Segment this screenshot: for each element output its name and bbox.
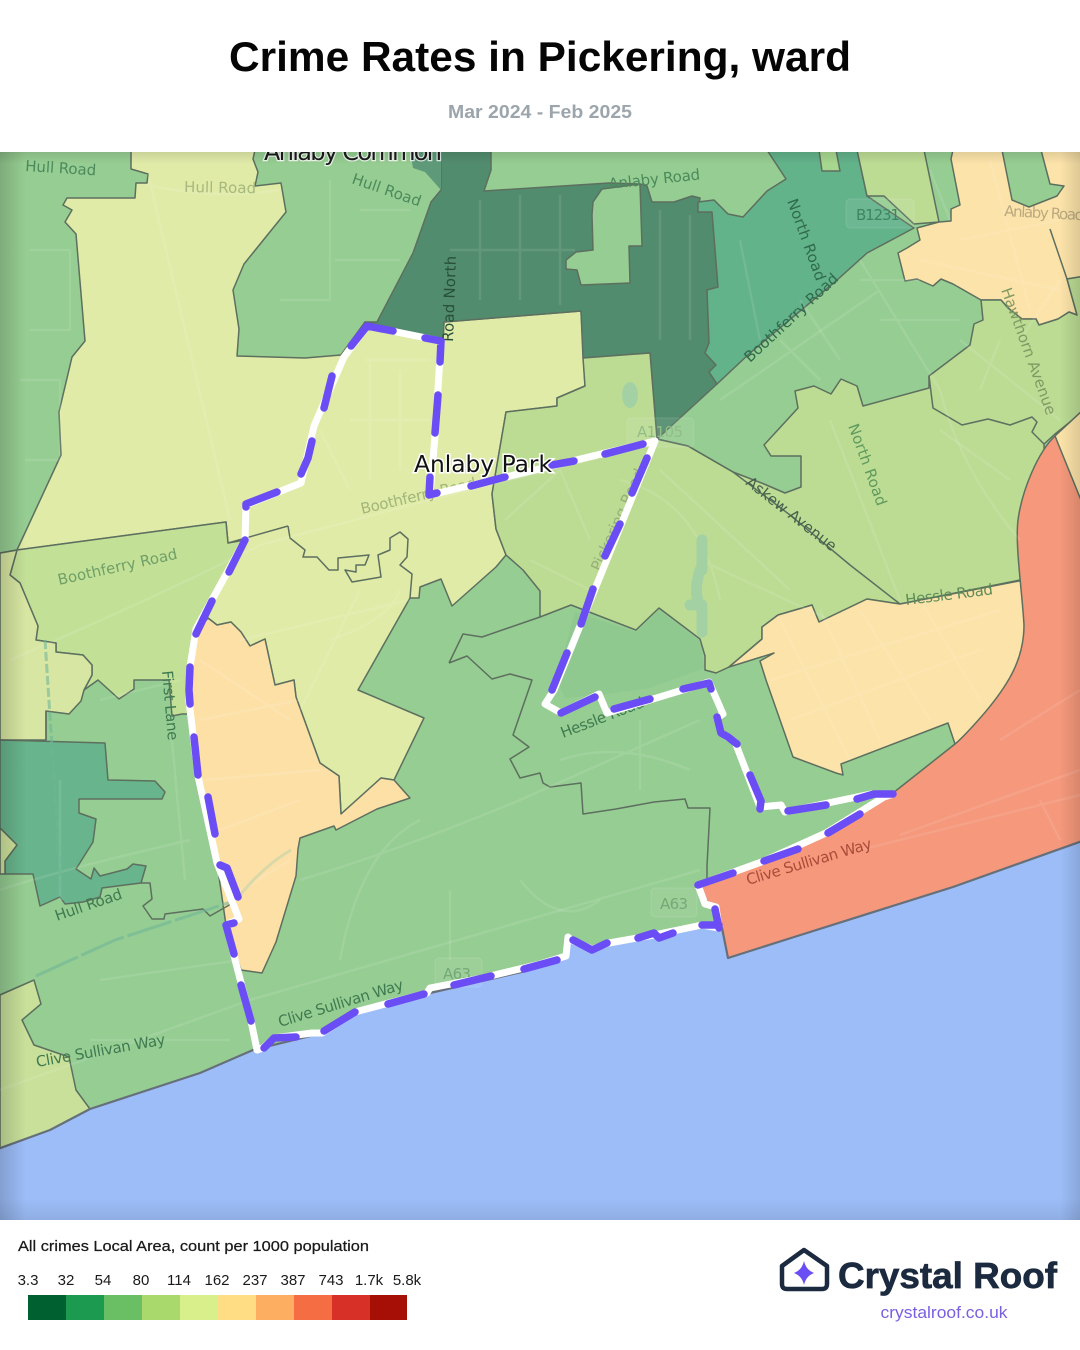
legend values: 3.3 [18,1272,38,1289]
region: east orange corner [1054,412,1080,496]
road name labels: Clive Sullivan Way [35,1030,167,1071]
map edge vignette [0,152,1080,1220]
region: north-east line [1050,229,1067,279]
road name labels: Pickering Road [587,466,648,574]
region: big lime south-east of Boothferry [492,276,1080,673]
road name labels: Hessle Road [558,693,647,742]
road name labels: Askew Avenue [743,473,840,555]
road name labels: B1231 [856,206,900,224]
road name labels: North Road [844,421,891,508]
road name labels: A1105 [637,423,683,441]
road name labels: Road North [439,256,460,342]
region: south-east orange ward [729,576,1045,775]
legend values: 54 [95,1272,111,1289]
region: dark green top sliver [410,150,441,190]
road name labels: Hull Road [184,178,256,197]
water: Humber estuary [0,840,1080,1225]
road name labels: A63 [443,965,471,983]
road name labels: Hull Road [350,170,424,210]
road name labels: Hessle Road [904,580,994,609]
legend values: 743 [318,1272,344,1289]
road name labels: Hawthorn Avenue [997,285,1060,417]
region: mid-dark north-east ward [698,150,914,384]
website: crystalroof.co.uk [880,1304,1008,1322]
region: south-west lime [0,980,90,1148]
logo: Crystal Roof [782,1250,1058,1322]
legend values [18,1272,422,1289]
road name labels: A63 [660,895,688,913]
region: west darker green [0,740,165,906]
wordmark: Crystal Roof [838,1255,1058,1296]
icon: house with star [782,1250,827,1289]
legend values: 1.7k [355,1272,384,1289]
region: west orange ward [189,618,410,973]
legend values: 237 [242,1272,268,1289]
road name labels: Boothferry Road [359,474,478,518]
road name labels: North Road [783,196,830,283]
road name labels: First Lane [158,670,182,741]
legend values: 387 [280,1272,306,1289]
rail lines [36,640,291,976]
region: far-west pale strip [0,550,92,740]
road name labels: Boothferry Road [740,270,842,366]
place label: Anlaby Park: Anlaby Park [414,452,553,478]
place label: Anlaby Common: Anlaby Common [264,138,442,166]
road name labels: Clive Sullivan Way [744,835,874,889]
subtitle: date range: Mar 2024 - Feb 2025 [448,101,632,122]
legend values: 114 [167,1272,191,1289]
region: Boothferry light green ward [10,522,245,716]
legend values: 5.8k [393,1272,422,1289]
title: Crime Rates in Pickering, ward [229,33,851,80]
road shields [435,199,914,987]
boundary white casing [189,326,893,1050]
region: small notch [819,150,840,171]
legend colour scale [28,1295,407,1320]
inner ward boundaries [0,526,710,995]
road name labels: Hull Road [52,885,124,925]
road name labels [25,157,1080,1071]
region: dark green wards [365,150,718,439]
legend values: 32 [58,1272,74,1289]
ward boundary: Pickering [189,326,893,1050]
road name labels: Boothferry Road [56,545,179,589]
region: darker park area [700,640,701,643]
legend [18,1238,422,1320]
region: light patch inside dark ward [566,184,642,285]
park ponds [622,382,702,632]
legend values: 162 [204,1272,230,1289]
region: lime north-east strip [857,150,939,224]
legend values: 80 [133,1272,149,1289]
region: north-east orange ward [898,150,1080,325]
region: small west lime patch [0,828,17,874]
road network texture [0,160,1080,1090]
region: west pale yellow and central wards [17,150,585,814]
region: red high-crime ward [698,436,1080,958]
road name labels: Clive Sullivan Way [276,976,406,1031]
region: east lime boundary [929,376,1044,444]
boundary purple dashes [189,326,893,1048]
road name labels: Anlaby Road [608,165,701,193]
legend title: All crimes Local Area, count per 1000 population [18,1238,369,1255]
region: Askew Avenue boundary [657,439,900,604]
road name labels: Hull Road [25,157,97,179]
